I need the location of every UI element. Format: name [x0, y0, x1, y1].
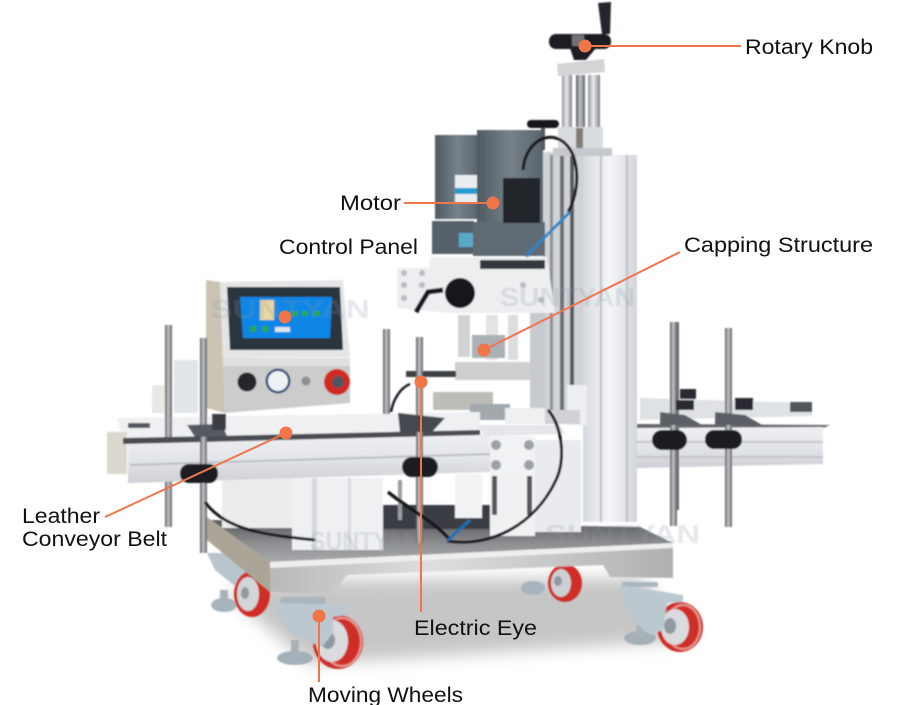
callout: motor: Motor: [340, 192, 401, 215]
callout: capping structure: Capping Structure: [684, 234, 873, 257]
callout: electric eye: [414, 376, 537, 640]
rear conveyor rail: [117, 412, 480, 438]
table block: [406, 371, 580, 424]
base plate: [207, 517, 673, 593]
front uprights and clamps: [180, 337, 445, 553]
top screw assembly: [553, 59, 612, 156]
callout: leather conveyor belt: [22, 426, 292, 551]
callout: leather conveyor belt: Leather: [22, 505, 100, 528]
front conveyor: [107, 425, 565, 483]
floor shadow: [225, 578, 695, 664]
callout: leather conveyor belt: Conveyor Belt: [22, 528, 167, 551]
rear uprights: [165, 325, 390, 527]
support frame and under-belt parts: [222, 436, 581, 550]
callout: rotary knob: Rotary Knob: [745, 36, 873, 59]
watermark: SUNTYAN: [500, 282, 635, 312]
watermark: [210, 282, 700, 556]
cables: [205, 384, 562, 542]
callout: moving wheels: [308, 610, 463, 705]
right conveyor: [637, 322, 830, 527]
machine illustration: [107, 2, 830, 669]
front casters: [275, 582, 703, 669]
capping head: [397, 257, 555, 423]
callout: motor: [340, 192, 500, 215]
watermark: SUNTYAN: [545, 519, 700, 549]
left valve: [152, 360, 198, 413]
watermark: SUNTYAN: [310, 526, 420, 556]
callout: capping structure: [478, 234, 873, 356]
callout: control panel: [278, 236, 418, 324]
handwheel: [549, 2, 611, 60]
control panel: [206, 280, 350, 413]
callout: electric eye: Electric Eye: [414, 617, 537, 640]
callout: rotary knob: [578, 36, 873, 59]
motors: [432, 120, 577, 285]
watermark: SUNTYAN: [210, 294, 370, 324]
callout: control panel: Control Panel: [279, 236, 418, 259]
back casters: [207, 553, 582, 617]
vertical column: [543, 152, 637, 522]
